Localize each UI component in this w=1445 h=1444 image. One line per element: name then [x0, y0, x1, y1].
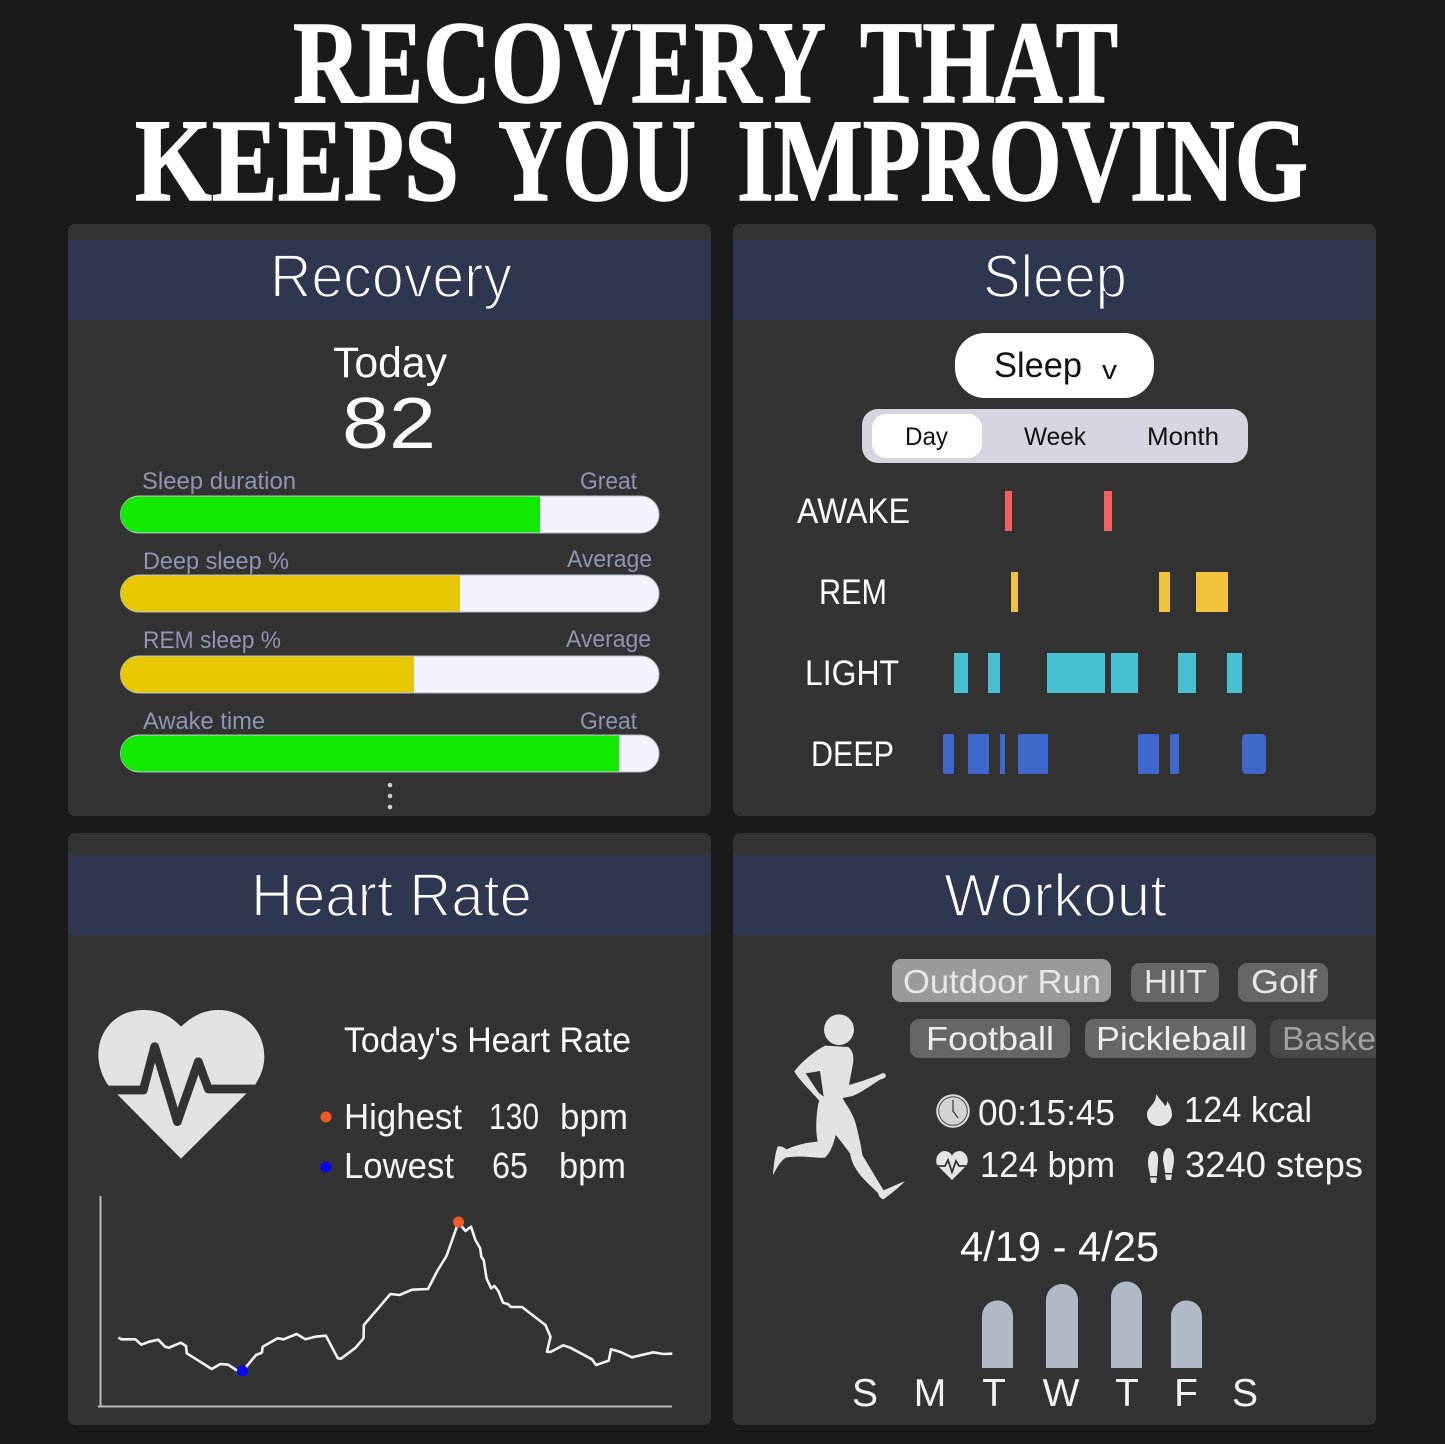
stat: steps: 3240 steps — [1185, 1144, 1363, 1185]
bar: rem sleep: Average — [566, 626, 651, 653]
bar: awake time — [120, 708, 659, 772]
chip: football: Football — [926, 1020, 1054, 1057]
bar: rem sleep: REM sleep % — [143, 627, 281, 654]
weekday labels: W — [1043, 1372, 1080, 1415]
row: light: LIGHT — [805, 654, 899, 693]
dropdown: sleep — [955, 333, 1154, 398]
text: date range: 4/19 - 4/25 — [960, 1223, 1159, 1270]
title: YOU — [498, 95, 696, 226]
bar: deep sleep — [120, 546, 659, 612]
bar: awake time: Awake time — [143, 708, 265, 735]
line chart: heart rate over time — [98, 1196, 672, 1406]
heading: recovery: Recovery — [270, 243, 512, 310]
row: deep: DEEP — [811, 735, 894, 774]
dropdown: sleep: v — [1102, 355, 1118, 385]
panel: sleep — [733, 224, 1376, 816]
title: THAT — [860, 0, 1118, 128]
bar: deep sleep: Deep sleep % — [143, 548, 289, 575]
bar: sleep duration: Great — [580, 468, 637, 495]
chip: hiit — [1131, 963, 1219, 1002]
title: IMPROVING — [737, 95, 1308, 226]
bar: deep sleep: Average — [567, 546, 652, 573]
panel: workout — [733, 833, 1376, 1425]
stat: lowest: bpm — [559, 1145, 626, 1186]
tabs: day week month: Day — [905, 423, 948, 451]
panel: heart rate — [68, 833, 711, 1425]
row: light — [805, 653, 1242, 693]
bar: awake time: Great — [580, 708, 637, 735]
row: rem: REM — [819, 573, 887, 612]
chip: outdoor run: Outdoor Run — [903, 963, 1101, 1000]
heading: workout: Workout — [944, 862, 1167, 929]
weekday labels — [852, 1372, 1258, 1415]
stat: lowest: 65 — [492, 1145, 528, 1186]
row: deep — [811, 734, 1266, 774]
weekday labels: F — [1174, 1372, 1198, 1415]
weekday labels: M — [914, 1372, 946, 1415]
chip: golf: Golf — [1251, 963, 1318, 1000]
heading: heart rate: Heart Rate — [251, 862, 532, 929]
title: KEEPS — [135, 95, 459, 226]
icon: heart with pulse — [97, 1010, 270, 1159]
stat: lowest — [320, 1145, 626, 1186]
bar: rem sleep — [120, 626, 659, 693]
chip: basketball cropped: Baske — [1282, 1020, 1376, 1057]
chip: hiit: HIIT — [1144, 963, 1207, 1000]
chip: pickleball: Pickleball — [1096, 1020, 1247, 1057]
stat: duration: 00:15:45 — [978, 1092, 1115, 1133]
weekday labels: S — [852, 1372, 878, 1415]
panel: recovery — [68, 224, 711, 816]
tabs: day week month — [862, 409, 1248, 463]
weekday labels: T — [982, 1372, 1006, 1415]
stat: heart rate: 124 bpm — [980, 1144, 1115, 1185]
title: RECOVERY — [293, 0, 826, 128]
bar: sleep duration — [120, 468, 659, 533]
chip: golf — [1238, 963, 1328, 1002]
row: rem — [819, 572, 1228, 612]
stat: lowest: Lowest — [344, 1145, 454, 1186]
icon: more dots — [388, 783, 392, 809]
text: today: Today — [333, 339, 447, 387]
bar chart: weekly workouts — [982, 1281, 1202, 1368]
score: 82: 82 — [342, 384, 436, 464]
stat: highest: bpm — [560, 1096, 628, 1137]
stat: calories: 124 kcal — [1184, 1089, 1312, 1130]
text: today's heart rate: Today's Heart Rate — [344, 1021, 631, 1060]
tabs: day week month: Month — [1147, 423, 1219, 451]
heading: sleep: Sleep — [983, 243, 1127, 310]
title — [135, 0, 1308, 226]
weekday labels: S — [1232, 1372, 1258, 1415]
stat: highest: 130 — [489, 1096, 539, 1137]
stat: highest — [320, 1096, 628, 1137]
row: awake — [797, 491, 1112, 531]
icon: runner — [773, 1014, 905, 1199]
row: awake: AWAKE — [797, 492, 910, 531]
chip: football — [910, 1019, 1070, 1058]
bar: sleep duration: Sleep duration — [142, 468, 296, 495]
weekday labels: T — [1115, 1372, 1139, 1415]
dropdown: sleep: Sleep — [994, 346, 1082, 385]
tabs: day week month: Week — [1024, 423, 1086, 451]
stat: highest: Highest — [344, 1096, 462, 1137]
